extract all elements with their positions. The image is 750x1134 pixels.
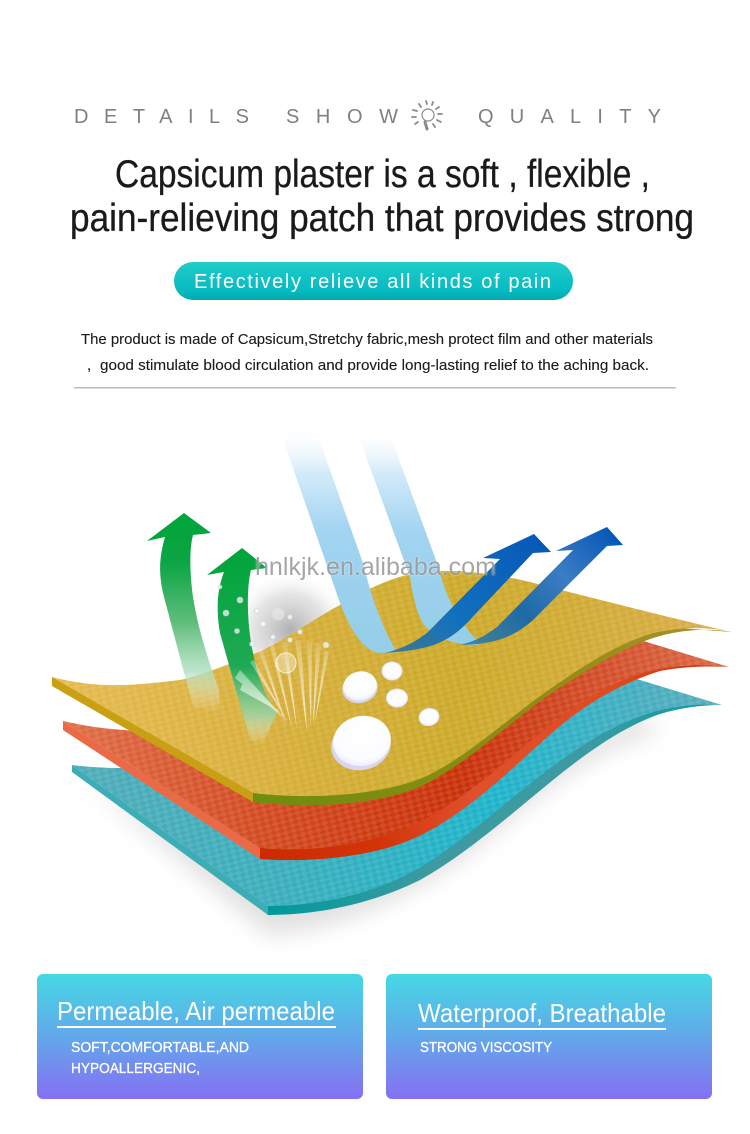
watermark: hnlkjk.en.alibaba.com xyxy=(255,553,496,581)
title: Capsicum plaster is a soft , flexible , xyxy=(115,153,650,196)
shadow under layers xyxy=(90,715,660,935)
layered fabric illustration xyxy=(52,425,732,935)
arrow: blue front xyxy=(385,534,551,653)
arrow: green left xyxy=(147,513,219,712)
water drops xyxy=(326,662,441,776)
header: details show quality: QUALITY xyxy=(478,106,661,128)
panel: permeable xyxy=(37,974,363,1099)
layer: yellow xyxy=(52,571,732,805)
pill banner xyxy=(174,262,573,300)
gray glow behind sparkles xyxy=(228,552,352,672)
description text: , xyxy=(87,357,91,374)
pill banner: Effectively relieve all kinds of pain xyxy=(194,271,551,293)
description text xyxy=(81,331,653,374)
panel: waterproof xyxy=(386,974,712,1099)
ribbon: light blue left xyxy=(278,425,397,653)
arrow: blue back xyxy=(460,527,623,645)
sparkles over yellow layer xyxy=(218,585,329,733)
header: details show quality: DETAILS xyxy=(74,106,249,128)
title xyxy=(70,153,694,240)
panel: permeable: HYPOALLERGENIC, xyxy=(71,1060,200,1077)
layer: teal xyxy=(72,677,722,915)
panel: permeable: SOFT,COMFORTABLE,AND xyxy=(71,1039,249,1056)
description text: good stimulate blood circulation and provide long-lasting relief to the aching back. xyxy=(100,357,649,374)
panel: waterproof: STRONG VISCOSITY xyxy=(420,1039,552,1056)
arrow: green right xyxy=(207,548,277,745)
panel: waterproof: Waterproof, Breathable xyxy=(418,998,666,1028)
header: details show quality: SHOW xyxy=(286,106,398,128)
header: details show quality xyxy=(74,106,661,128)
icon: light bulb xyxy=(412,101,442,129)
layer: red xyxy=(63,640,729,860)
description text: The product is made of Capsicum,Stretchy fabric,mesh protect film and other materials xyxy=(81,331,653,348)
title: pain-relieving patch that provides strong xyxy=(70,197,694,240)
ribbon: light blue right xyxy=(360,440,477,645)
panel: permeable: Permeable, Air permeable xyxy=(57,996,335,1026)
